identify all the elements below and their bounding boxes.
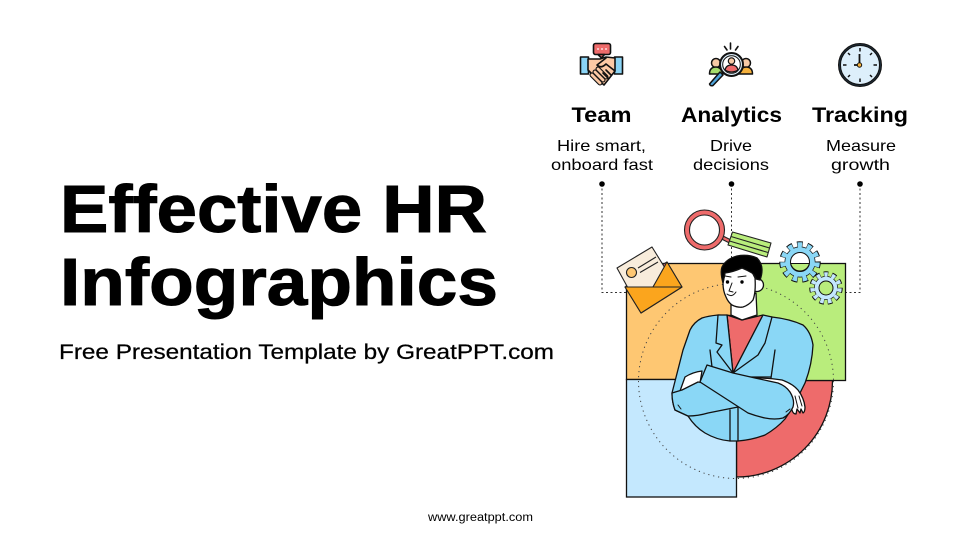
label: Team: onboard fast: [551, 157, 654, 174]
illustration: large gear: [783, 245, 817, 279]
jacket body: [672, 315, 813, 441]
label: Analytics: Analytics: [681, 104, 782, 127]
label: Team: Team: [572, 104, 632, 127]
lapels: [716, 315, 733, 373]
label: Team: [551, 104, 654, 174]
label: Tracking: Measure: [826, 138, 896, 155]
title: Effective HR: [60, 172, 487, 247]
label: Analytics: Drive: [710, 138, 752, 155]
shirt: [727, 315, 763, 373]
dotted circle: [638, 284, 834, 478]
title: [60, 172, 498, 320]
icon: handshake: [580, 44, 622, 85]
eyes and mouth: [726, 280, 729, 284]
illustration: small gear: [812, 274, 840, 302]
right hand: [755, 378, 805, 414]
left hand: [680, 371, 702, 391]
hair: [721, 255, 762, 283]
icon: clock: [838, 44, 882, 86]
illustration: background blocks: [626, 264, 846, 497]
label: Tracking: [812, 104, 908, 174]
illustration: magnifier: [684, 210, 771, 257]
label: Tracking: Tracking: [812, 104, 908, 127]
label: Analytics: [681, 104, 782, 174]
crossed arm over: [700, 365, 794, 419]
illustration: envelope: [617, 247, 682, 313]
connector lines: [599, 181, 863, 292]
crossed arm under: [672, 382, 752, 416]
footer url: www.greatppt.com: [427, 512, 533, 524]
label: Analytics: decisions: [693, 157, 769, 174]
icon: analytics magnifier with people: [710, 43, 752, 86]
face: [723, 268, 755, 307]
label: Tracking: growth: [831, 157, 890, 174]
ear: [750, 278, 764, 292]
title: Infographics: [60, 245, 498, 320]
subtitle: Free Presentation Template by GreatPPT.com: [59, 341, 554, 364]
label: Team: Hire smart,: [557, 138, 646, 155]
illustration: person: [672, 255, 813, 441]
neck: [731, 293, 757, 320]
